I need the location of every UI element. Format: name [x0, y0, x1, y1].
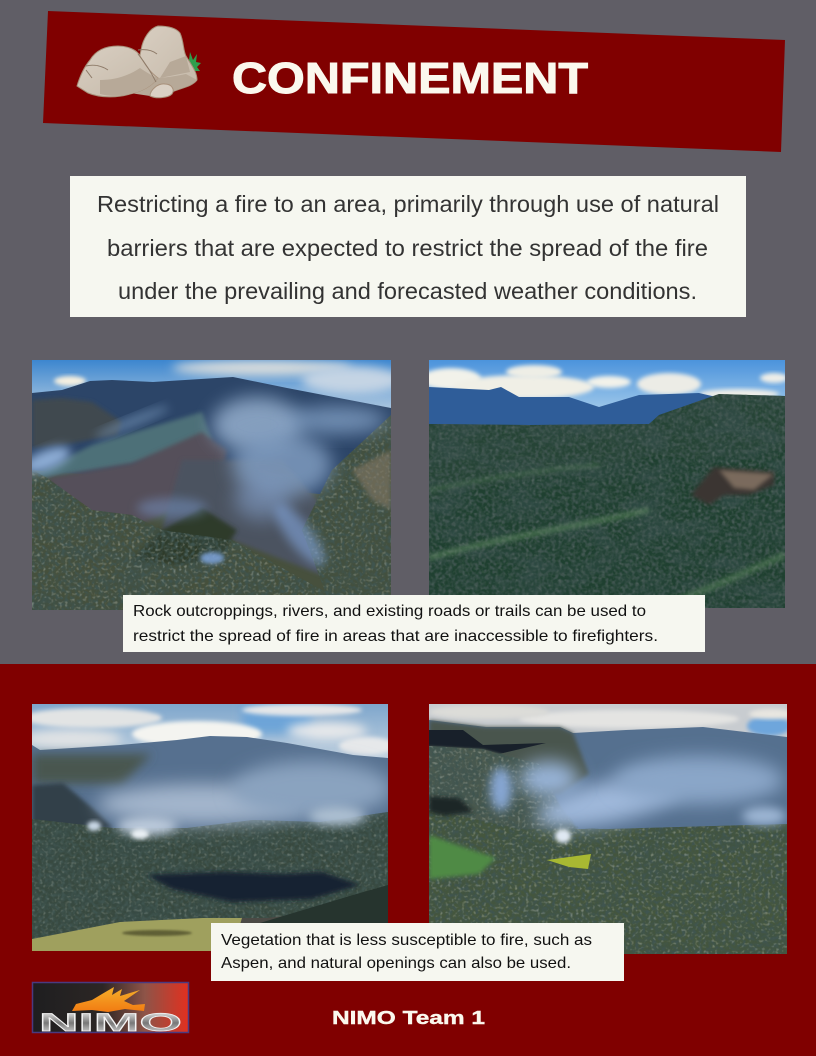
caption: vegetation: Vegetation that is less susceptible to fire, such as [221, 932, 592, 949]
definition text block: under the prevailing and forecasted weather conditions. [118, 278, 697, 304]
footer: team name: NIMO Team 1 [332, 1007, 485, 1028]
logo: NIMO [32, 982, 188, 1037]
heading: CONFINEMENT: CONFINEMENT [232, 54, 588, 103]
title banner [43, 11, 785, 152]
photo: smoke over forest with a small green clearing [429, 704, 793, 954]
background: lower red section [0, 664, 816, 1056]
caption: rock outcroppings: Rock outcroppings, rivers, and existing roads or trails can be used to [133, 603, 646, 620]
photo: smoke rising from a forested ridge [20, 360, 402, 610]
icon: boulders with grass [77, 26, 201, 98]
definition text block [70, 176, 746, 317]
definition text block: Restricting a fire to an area, primarily through use of natural [97, 191, 719, 217]
photo: forested valley with rock outcropping [421, 360, 788, 608]
photo: smoke above a valley and meadow [22, 704, 395, 951]
caption: rock outcroppings [123, 595, 705, 652]
logo: NIMO: NIMO [39, 1009, 182, 1037]
caption: vegetation: Aspen, and natural openings can also be used. [221, 955, 571, 972]
background: upper gray section [0, 0, 816, 664]
caption: vegetation [211, 923, 624, 981]
definition text block: barriers that are expected to restrict the spread of the fire [107, 235, 708, 261]
caption: rock outcroppings: restrict the spread of fire in areas that are inaccessible to firefighters. [133, 628, 658, 645]
icon: flame [72, 987, 145, 1012]
